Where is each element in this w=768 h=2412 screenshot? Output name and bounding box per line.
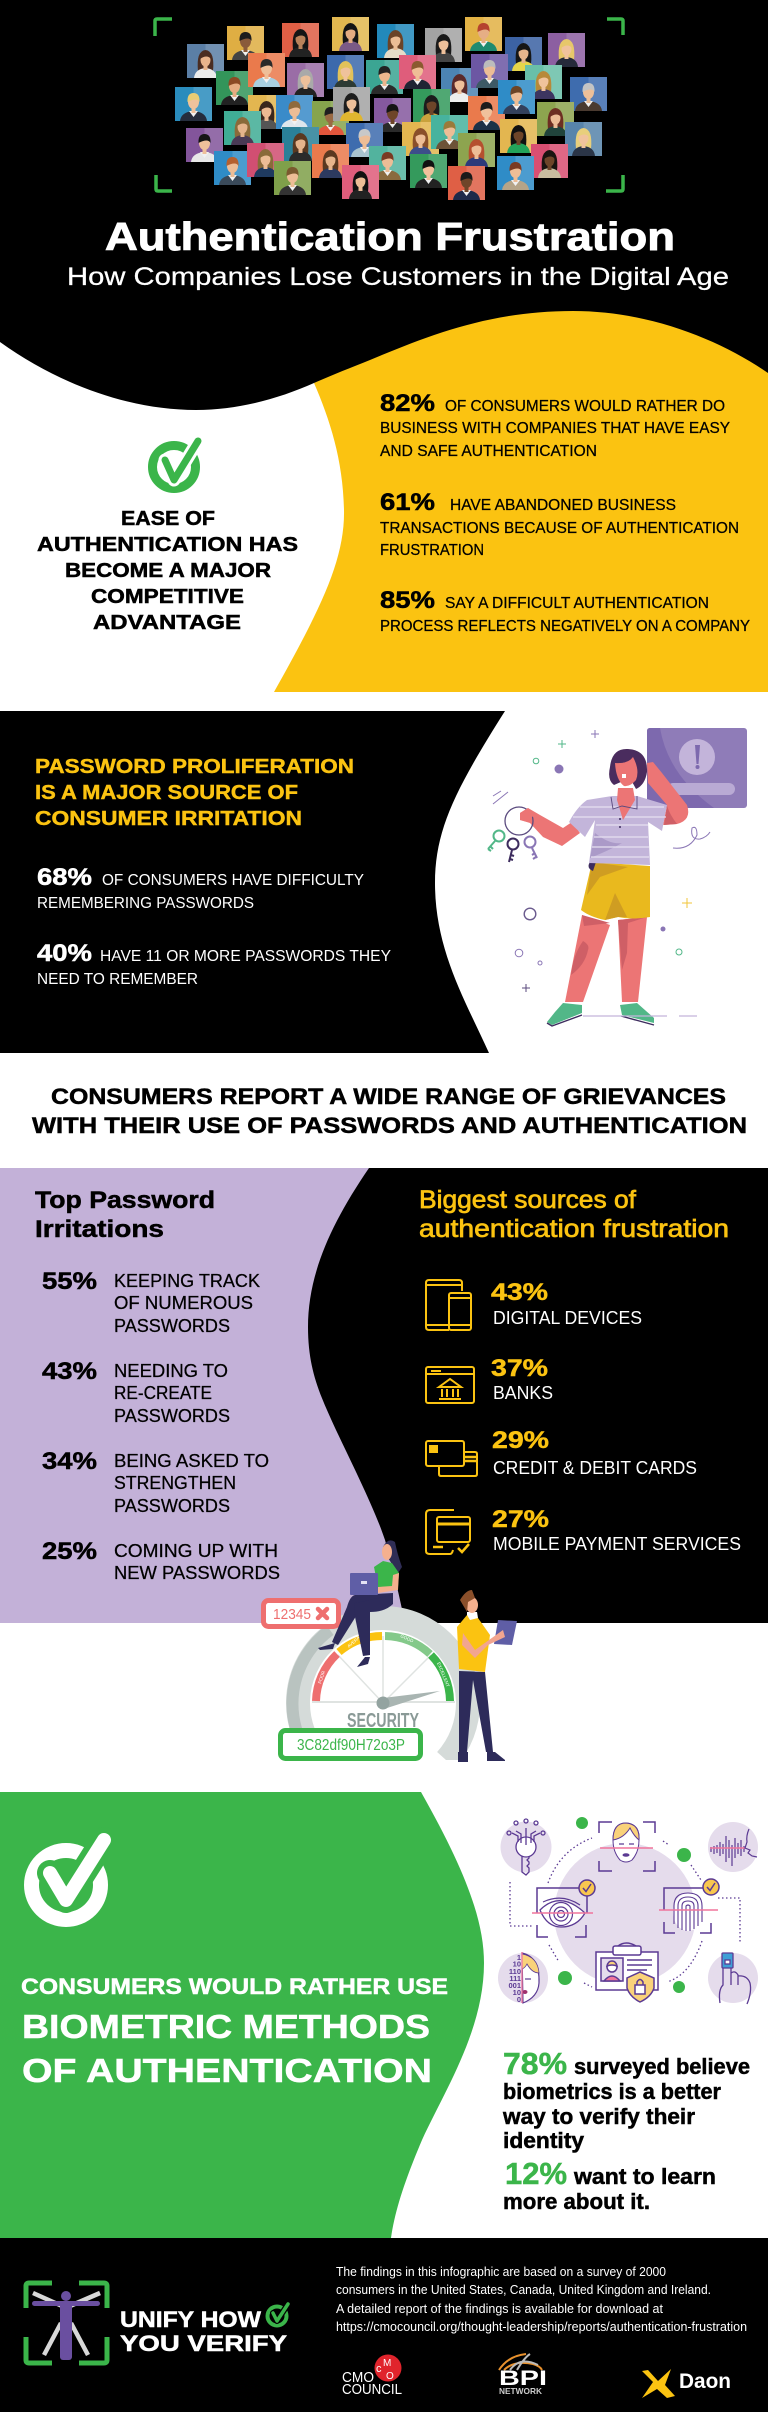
logo: unify how you verify: UNIFY HOW [120,2307,261,2332]
heading: password proliferation: CONSUMER IRRITATION [35,807,302,830]
stat: 82 percent [380,390,730,460]
panel: yellow statistics background [274,290,768,692]
stat: 68 percent: 68% [37,864,92,891]
stat: 82 percent: OF CONSUMERS WOULD RATHER DO [445,398,725,415]
man with tablet [457,1590,517,1762]
head [609,749,647,789]
logo: CMO Council: M [383,2358,391,2369]
eye scan [532,1880,595,1937]
logo figure [26,2283,107,2363]
stat: 82 percent: BUSINESS WITH COMPANIES THAT HAVE EASY [380,420,730,437]
logo: CMO Council [342,2354,402,2398]
stat: 12 percent learn more: more about it. [503,2189,650,2214]
heading: top password irritations [35,1187,215,1243]
item: keeping track [42,1268,260,1336]
stat: 40 percent: NEED TO REMEMBER [37,971,198,988]
text block: survey notes: A detailed report of the findings is available for download at [336,2302,664,2316]
text block: ease of authentication [37,508,298,634]
text block: survey notes: The findings in this infographic are based on a survey of 2000 [336,2265,666,2279]
keys on ring [488,807,537,862]
item: coming up with [42,1538,280,1583]
decorative sparkles [493,730,710,992]
stat: digital devices: DIGITAL DEVICES [493,1308,642,1328]
stat: 85 percent: PROCESS REFLECTS NEGATIVELY ON A COMPANY [380,618,750,635]
stat: 85 percent: SAY A DIFFICULT AUTHENTICATION [445,595,709,612]
stat: 61 percent: FRUSTRATION [380,542,484,559]
heading: password proliferation: IS A MAJOR SOURCE OF [35,781,298,804]
item: keeping track: PASSWORDS [114,1316,230,1336]
text block: ease of authentication: EASE OF [121,508,215,530]
panel: yellow statistics [380,390,750,635]
digital face: 110 [509,1967,521,1976]
photo grid of customer portraits [175,17,607,200]
gauge arch [270,1618,470,1774]
stat: digital devices: 43% [491,1279,548,1306]
stat: 78 percent biometrics: 78% [503,2046,567,2081]
logo: unify how you verify [26,2283,288,2363]
weak password box [264,1600,338,1626]
stat: digital devices [491,1279,642,1328]
digital face: 001 [508,1981,521,1990]
title: Authentication Frustration [105,216,675,259]
heading: biometric methods: CONSUMERS WOULD RATHER USE [21,1974,448,1999]
gauge arch: POOR [317,1669,326,1684]
digital key [507,1819,545,1875]
digital face: 111 [509,1974,521,1983]
item: needing to re-create: RE-CREATE [114,1383,212,1403]
stat: 12 percent learn more: 12% [505,2156,567,2191]
logo: BPI Network: NETWORK [499,2386,543,2396]
panel: biometric green background [0,1792,484,2238]
finger on sensor [719,1953,751,2004]
stat: 40 percent [37,940,391,988]
raised arm [647,762,688,825]
icon: mobile payment [426,1510,470,1554]
icon: large white check [32,1840,104,1920]
item: being asked to strengthen: STRENGTHEN [114,1473,236,1493]
stat: banks: BANKS [493,1383,553,1403]
stat: credit and debit cards [492,1427,697,1478]
shirt [569,796,667,865]
item: needing to re-create: NEEDING TO [114,1361,228,1381]
heading: top password irritations: Irritations [35,1216,164,1243]
item: being asked to strengthen: BEING ASKED TO [114,1451,269,1471]
item: being asked to strengthen [42,1448,269,1516]
stat: mobile payment services: 27% [492,1506,549,1533]
stat: 82 percent: 82% [380,390,435,417]
text block: ease of authentication: AUTHENTICATION HAS [37,534,298,556]
heading: biometric methods: OF AUTHENTICATION [22,2053,432,2090]
panel: password proliferation background [0,711,505,1053]
shoes [547,1003,582,1025]
stat: 12 percent learn more [503,2156,716,2214]
heading: password proliferation: PASSWORD PROLIFERATION [35,755,354,778]
logo: BPI Network [499,2354,547,2396]
stat: 68 percent: OF CONSUMERS HAVE DIFFICULTY [102,872,364,889]
icon: digital devices [426,1280,471,1330]
stat: 61 percent [380,489,739,559]
logo: CMO Council: COUNCIL [342,2381,402,2398]
stat: 82 percent: AND SAFE AUTHENTICATION [380,443,597,460]
item: keeping track: OF NUMEROUS [114,1293,253,1313]
panel: biggest sources background [308,1168,768,1623]
stat: 12 percent learn more: want to learn [573,2164,716,2189]
icon: credit cards [426,1441,477,1476]
stat: credit and debit cards: CREDIT & DEBIT CARDS [493,1458,697,1478]
stat: 40 percent: HAVE 11 OR MORE PASSWORDS THEY [100,948,391,965]
stat: 78 percent biometrics: surveyed believe [574,2054,750,2079]
stat: 78 percent biometrics: biometrics is a better [503,2079,721,2104]
item: needing to re-create: 43% [42,1358,97,1385]
fingerprint scan [659,1879,719,1933]
alert card [647,728,747,808]
voice wave [710,1829,757,1866]
left arm [520,808,580,846]
heading: biometric methods [21,1974,448,2090]
illustration: security gauge with figures [264,1540,517,1774]
strong password box [280,1730,420,1758]
small check [268,2304,288,2326]
heading: biggest sources: Biggest sources of [419,1186,636,1214]
item: keeping track: KEEPING TRACK [114,1271,260,1291]
icon: bank [426,1367,474,1403]
subtitle: How Companies Lose Customers in the Digital Age [67,263,729,291]
stat: 61 percent: HAVE ABANDONED BUSINESS [450,497,676,514]
heading: biometric methods: BIOMETRIC METHODS [22,2009,430,2046]
weak password box: 12345 [273,1606,311,1623]
gauge arch: AVERAGE [346,1631,366,1649]
item: needing to re-create [42,1358,230,1426]
logo: unify how you verify: YOU VERIFY [120,2331,287,2356]
illustration: woman with keys and alert [488,728,747,1026]
item: being asked to strengthen: 34% [42,1448,97,1475]
logo: Daon: Daon [679,2370,731,2393]
strong password box: 3C82df90H72o3P [297,1737,405,1754]
id badge [596,1943,658,2002]
stat: 78 percent biometrics: identity [503,2128,585,2153]
dotted connectors [510,1838,740,1987]
digital face: 10 [513,1988,521,1997]
stat: 68 percent: REMEMBERING PASSWORDS [37,895,254,912]
digital face [508,1952,539,2004]
stat: 61 percent: 61% [380,489,435,516]
item: coming up with: NEW PASSWORDS [114,1563,280,1583]
panel: footer [0,2238,768,2412]
stat: banks [491,1355,553,1403]
text block: survey notes [336,2265,747,2334]
heading: grievances: CONSUMERS REPORT A WIDE RANGE OF GRIEVANCES [51,1084,726,1109]
stat: mobile payment services: MOBILE PAYMENT SERVICES [493,1534,741,1554]
woman sitting with laptop [318,1540,402,1667]
green dots [558,1817,691,1993]
stat: mobile payment services [492,1506,741,1554]
logo: CMO Council: c [376,2363,382,2375]
text block: ease of authentication: COMPETITIVE [91,586,244,608]
item: keeping track: 55% [42,1268,97,1295]
stat: 61 percent: TRANSACTIONS BECAUSE OF AUTHENTICATION [380,520,739,537]
item: coming up with: COMING UP WITH [114,1541,278,1561]
heading: grievances [32,1084,747,1138]
stat: 78 percent biometrics: way to verify their [502,2104,695,2129]
face scan [599,1822,655,1871]
digital face: 10 [513,1960,521,1968]
digital face: 0 [517,1995,521,2004]
stat: 78 percent biometrics [502,2046,750,2153]
logo: Daon [642,2369,731,2398]
logo: CMO Council: O [386,2371,394,2382]
gauge arch: SECURITY [347,1710,419,1732]
panel: top password irritations background [0,1168,420,1623]
stat: 40 percent: 40% [37,940,92,967]
stat: 68 percent [37,864,364,912]
green viewfinder brackets [155,19,623,191]
stat: 85 percent: 85% [380,587,435,614]
heading: biggest sources [419,1186,729,1243]
icon: green check [152,441,198,488]
illustration: biometric methods [498,1817,758,2004]
legs [565,915,610,1002]
heading: password proliferation [35,755,354,830]
digital face: 1 [517,1953,521,1962]
heading: top password irritations: Top Password [35,1187,215,1214]
stat: banks: 37% [491,1355,548,1382]
stat: 85 percent [380,587,750,635]
text block: survey notes: consumers in the United States, Canada, United Kingdom and Ireland. [336,2283,711,2297]
item: coming up with: 25% [42,1538,97,1565]
gauge arch: GOOD [400,1633,415,1644]
heading: grievances: WITH THEIR USE OF PASSWORDS AND AUTHENTICATION [32,1113,747,1138]
logo: BPI Network: BPI [499,2367,547,2390]
background circles [498,1822,758,2003]
item: needing to re-create: PASSWORDS [114,1406,230,1426]
stat: credit and debit cards: 29% [492,1427,549,1454]
text block: ease of authentication: BECOME A MAJOR [65,560,272,582]
heading: biggest sources: authentication frustration [419,1215,729,1243]
panel: black header wave [0,0,768,410]
text block: ease of authentication: ADVANTAGE [93,612,241,634]
gauge arch: EXCELLENT [436,1662,451,1688]
text block: survey notes: https://cmocouncil.org/thought-leadership/reports/authentication-frustration [336,2320,747,2334]
figure [520,749,697,1026]
item: being asked to strengthen: PASSWORDS [114,1496,230,1516]
shorts [581,862,650,920]
logo: CMO Council: CMO [342,2369,374,2386]
